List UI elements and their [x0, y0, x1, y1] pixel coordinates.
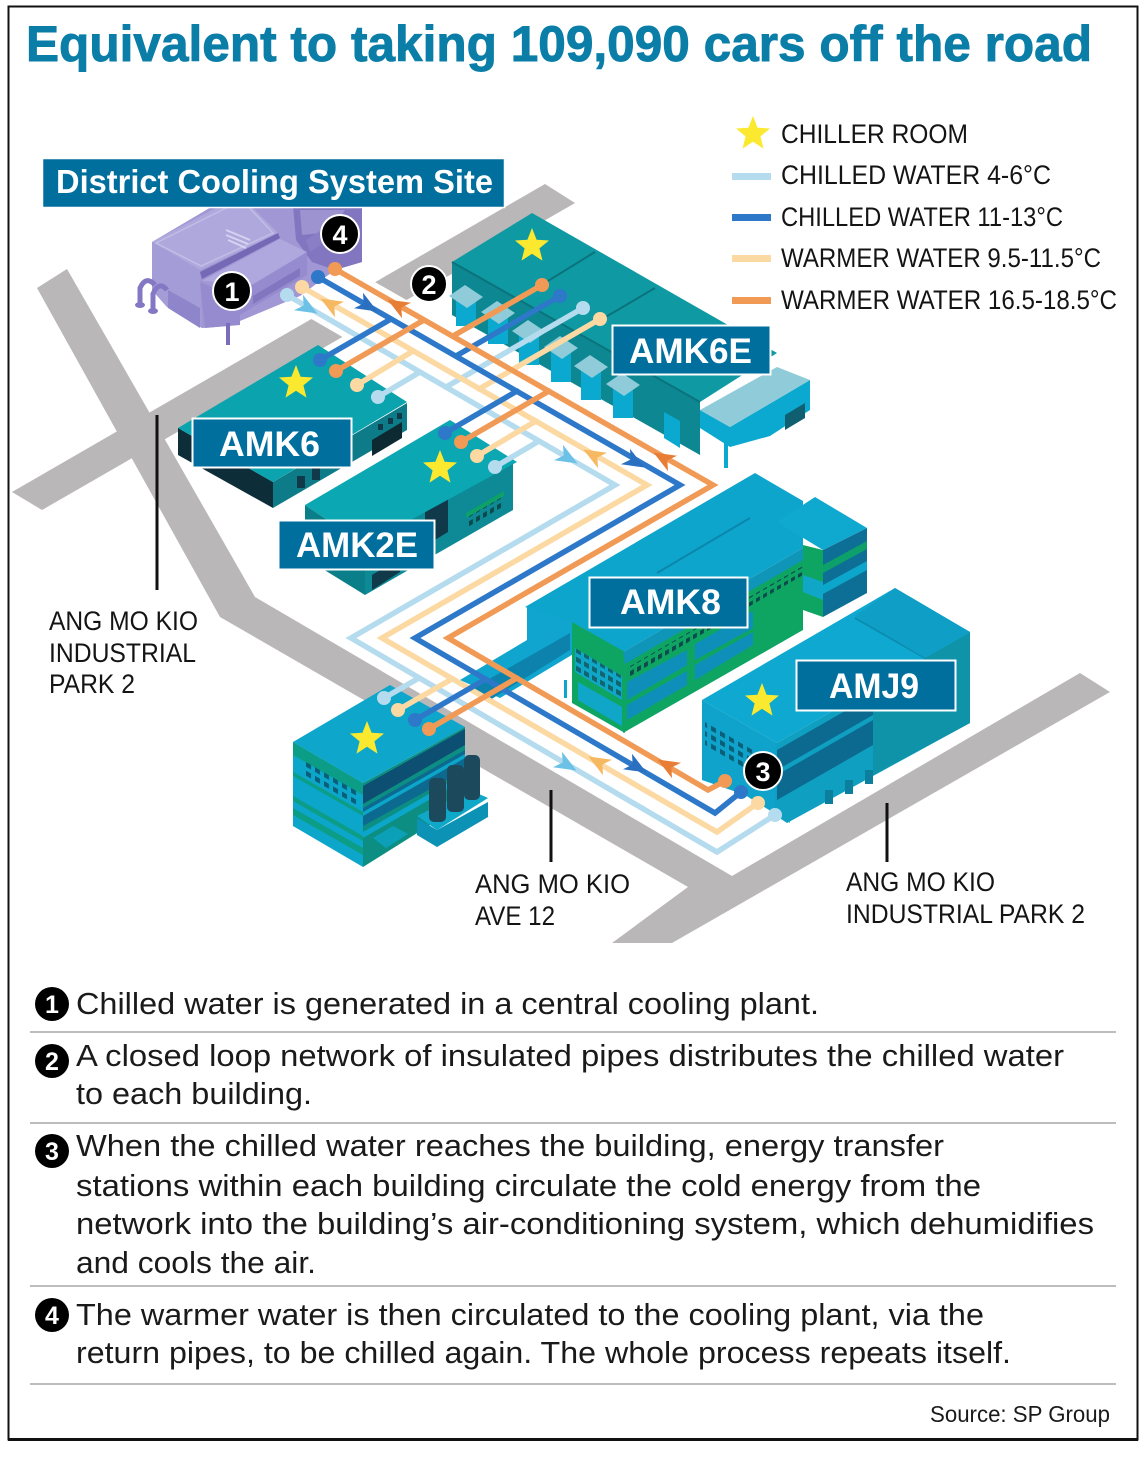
source: Source: SP Group — [930, 1401, 1110, 1427]
step 4 text — [35, 1297, 1011, 1370]
step 2 text: 2 — [45, 1048, 59, 1076]
label: AMK6 — [192, 418, 352, 468]
step marker 1 on map: 1 — [224, 277, 240, 307]
heading: District Cooling System Site: District Cooling System Site — [56, 163, 493, 200]
step 3 text: stations within each building circulate the cold energy from the — [76, 1168, 981, 1203]
building: AMJ9 — [702, 588, 970, 823]
step marker 2 on map: 2 — [421, 270, 437, 300]
building: AMK6E — [449, 213, 810, 468]
roads — [12, 184, 1110, 943]
step 1 text: 1 — [45, 991, 59, 1019]
road label: Ang Mo Kio Ave 12 — [475, 869, 630, 931]
pipe: warmer water 16.5-18.5 — [335, 269, 725, 790]
step marker 2 on map — [411, 266, 447, 302]
road label: Ang Mo Kio Industrial Park 2 left — [49, 606, 198, 699]
label: AMK2E: AMK2E — [296, 526, 418, 565]
road label: Ang Mo Kio Ave 12: AVE 12 — [475, 901, 555, 931]
legend: CHILLED WATER 11-13°C — [781, 202, 1063, 232]
step 1 text: Chilled water is generated in a central cooling plant. — [76, 986, 819, 1021]
step 2 text: to each building. — [76, 1076, 312, 1111]
building: AMK8 — [460, 473, 867, 733]
step 4 text: The warmer water is then circulated to the cooling plant, via the — [76, 1297, 984, 1332]
step 3 text: When the chilled water reaches the building, energy transfer — [76, 1128, 944, 1163]
label: AMK8 — [590, 578, 748, 628]
step 4 text: 4 — [45, 1302, 59, 1330]
flow arrows — [294, 291, 681, 780]
step marker 1 on map — [213, 272, 251, 310]
label: AMJ9: AMJ9 — [829, 667, 919, 706]
legend — [732, 116, 1117, 315]
label: AMK8: AMK8 — [620, 583, 721, 622]
leader lines — [157, 415, 887, 862]
step 2 text — [35, 1038, 1064, 1111]
legend: CHILLER ROOM — [781, 119, 968, 149]
title: Equivalent to taking 109,090 cars off the road — [26, 16, 1092, 72]
step 4 text: return pipes, to be chilled again. The whole process repeats itself. — [76, 1335, 1011, 1370]
road label: Ang Mo Kio Industrial Park 2 right — [846, 867, 1085, 929]
pipe end points — [280, 262, 782, 822]
pipe: chilled water 4-6 — [287, 295, 775, 852]
map: site diagram — [12, 158, 1110, 943]
pipe: warmer water 9.5-11.5 — [302, 287, 758, 832]
step marker 4 on map: 4 — [332, 220, 348, 250]
road label: Ang Mo Kio Industrial Park 2 right: INDUSTRIAL PARK 2 — [846, 899, 1085, 929]
step 3 text: and cools the air. — [76, 1245, 316, 1280]
step marker 4 on map — [321, 215, 359, 253]
pipes — [287, 269, 775, 852]
label: AMK6E: AMK6E — [629, 332, 752, 371]
legend: CHILLED WATER 4-6°C — [781, 160, 1051, 190]
road label: Ang Mo Kio Ave 12: ANG MO KIO — [475, 869, 630, 899]
label: AMK6: AMK6 — [219, 425, 320, 464]
step 3 text — [35, 1128, 1094, 1280]
label: AMK6E — [612, 326, 770, 374]
road label: Ang Mo Kio Industrial Park 2 right: ANG MO KIO — [846, 867, 995, 897]
building: Ang Mo Kio Ave 12 block — [293, 685, 488, 867]
step marker 3 on map: 3 — [755, 757, 771, 787]
road label: Ang Mo Kio Industrial Park 2 left: ANG MO KIO — [49, 606, 198, 636]
pipe casing: white corridor — [287, 269, 775, 852]
building: AMK2E — [305, 420, 517, 595]
building: AMK6 — [178, 345, 407, 508]
label: AMJ9 — [796, 660, 956, 710]
label: AMK2E — [278, 520, 434, 570]
road label: Ang Mo Kio Industrial Park 2 left: INDUSTRIAL — [49, 638, 196, 668]
legend: WARMER WATER 9.5-11.5°C — [781, 243, 1101, 273]
step 2 text: A closed loop network of insulated pipes distributes the chilled water — [76, 1038, 1064, 1073]
building: central cooling plant — [135, 158, 362, 345]
step 3 text: network into the building’s air-conditioning system, which dehumidifies — [76, 1206, 1094, 1241]
pipe: chilled water 11-13 — [318, 277, 741, 813]
step marker 3 on map — [744, 752, 782, 790]
chiller room stars — [279, 228, 779, 754]
road label: Ang Mo Kio Industrial Park 2 left: PARK 2 — [49, 669, 135, 699]
step 3 text: 3 — [45, 1138, 59, 1166]
